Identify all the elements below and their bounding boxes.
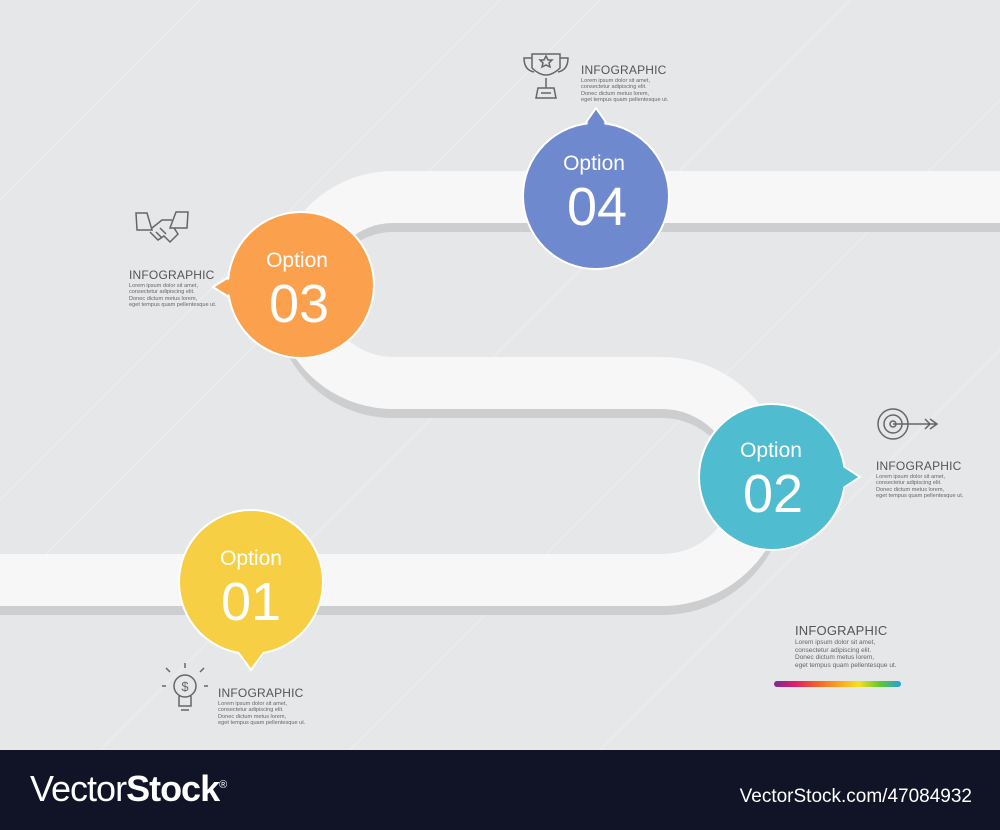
option 04: 04 xyxy=(567,177,627,237)
text: option 01: consectetur adipiscing elit. xyxy=(218,707,284,713)
text: option 01 xyxy=(218,686,305,726)
option 02: Option xyxy=(740,439,802,462)
text: option 02 xyxy=(876,459,963,499)
footer logo: VectorStock® xyxy=(30,768,226,809)
option 04 xyxy=(523,108,669,269)
option 01 xyxy=(179,510,323,670)
option 02: 02 xyxy=(743,464,803,524)
text: option 02: Lorem ipsum dolor sit amet, xyxy=(876,474,945,480)
icon: lightbulb dollar xyxy=(162,663,208,710)
text: option 03: Donec dictum metus lorem, xyxy=(129,296,197,302)
option 03: 03 xyxy=(269,274,329,334)
text: summary xyxy=(795,623,897,668)
text: option 01: Donec dictum metus lorem, xyxy=(218,714,286,720)
text: option 04: consectetur adipiscing elit. xyxy=(581,84,647,90)
text: summary: INFOGRAPHIC xyxy=(795,623,887,638)
text: summary: Donec dictum metus lorem, xyxy=(795,654,874,661)
text: option 02: eget tempus quam pellentesque ut. xyxy=(876,493,963,499)
text: option 02: INFOGRAPHIC xyxy=(876,459,962,473)
text: option 03: Lorem ipsum dolor sit amet, xyxy=(129,283,198,289)
text: option 04: Lorem ipsum dolor sit amet, xyxy=(581,78,650,84)
text: option 01: Lorem ipsum dolor sit amet, xyxy=(218,701,287,707)
text: option 04: eget tempus quam pellentesque ut. xyxy=(581,97,668,103)
text: option 01: eget tempus quam pellentesque ut. xyxy=(218,720,305,726)
text: option 01: INFOGRAPHIC xyxy=(218,686,304,700)
text: option 04 xyxy=(581,63,668,103)
icon: lightbulb dollar: $ xyxy=(181,679,189,694)
option 03: Option xyxy=(266,249,328,272)
text: option 04: INFOGRAPHIC xyxy=(581,63,667,77)
rainbow bar xyxy=(774,681,901,687)
footer xyxy=(0,750,1000,830)
text: summary: eget tempus quam pellentesque ut. xyxy=(795,662,897,668)
icon: target xyxy=(878,409,937,439)
icon: handshake xyxy=(136,212,188,242)
option 01: 01 xyxy=(221,572,281,632)
text: option 03 xyxy=(129,268,216,308)
text: summary: consectetur adipiscing elit. xyxy=(795,646,871,654)
text: option 02: consectetur adipiscing elit. xyxy=(876,480,942,486)
text: option 02: Donec dictum metus lorem, xyxy=(876,487,944,493)
text: option 03: eget tempus quam pellentesque ut. xyxy=(129,302,216,308)
option 03 xyxy=(213,212,374,358)
text: option 03: consectetur adipiscing elit. xyxy=(129,289,195,295)
footer url: VectorStock.com/47084932 xyxy=(740,786,972,807)
text: option 03: INFOGRAPHIC xyxy=(129,268,215,282)
text: option 04: Donec dictum metus lorem, xyxy=(581,91,649,97)
option 01: Option xyxy=(220,547,282,570)
road xyxy=(0,197,1000,589)
text: summary: Lorem ipsum dolor sit amet, xyxy=(795,639,875,646)
option 04: Option xyxy=(563,152,625,175)
option 02 xyxy=(699,404,860,550)
icon: trophy xyxy=(524,54,568,98)
